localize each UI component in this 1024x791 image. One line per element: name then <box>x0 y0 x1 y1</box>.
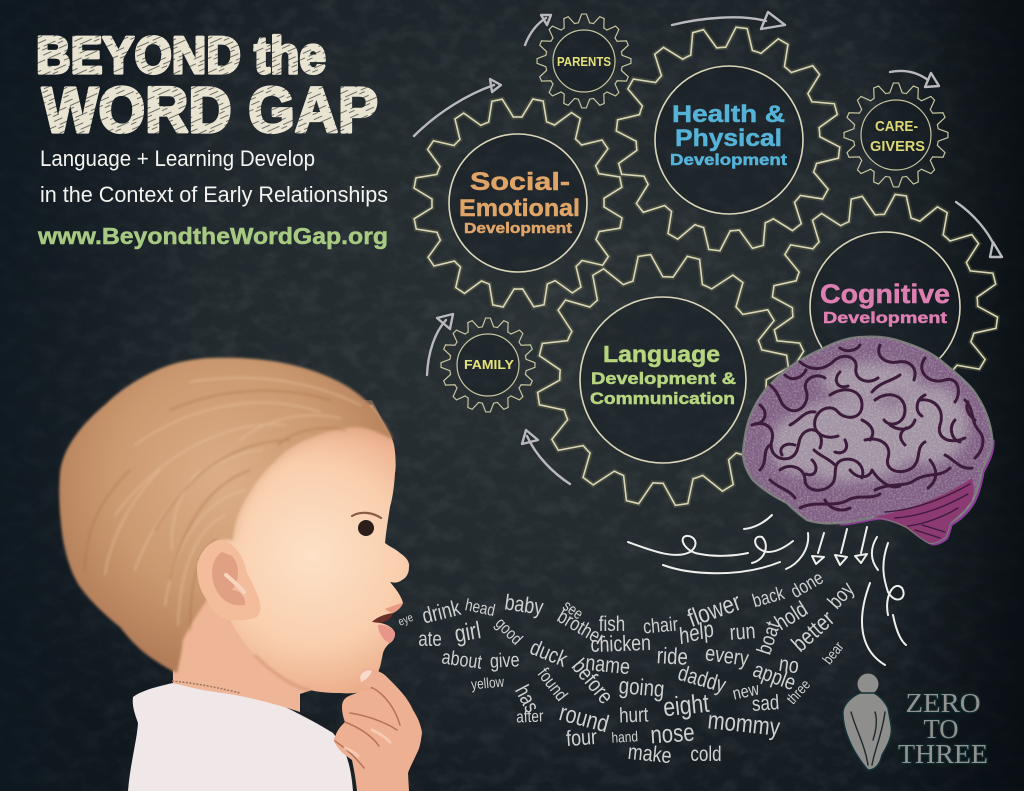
arrow: toward health <box>672 12 785 29</box>
shirt <box>128 683 353 791</box>
word cloud: fish <box>599 613 625 636</box>
word cloud: new <box>731 679 761 704</box>
word cloud: eye <box>396 611 415 629</box>
hand <box>334 668 422 791</box>
label: Language <box>603 341 720 367</box>
gear: health and physical development <box>603 14 853 264</box>
hair <box>59 358 393 673</box>
word cloud: ate <box>418 628 442 651</box>
word cloud: eight <box>662 689 711 723</box>
word cloud: drink <box>420 596 464 629</box>
arrow: social to parents <box>414 79 501 136</box>
word cloud: girl <box>452 616 483 648</box>
gear: language development and communication <box>510 227 816 533</box>
jaw shadow <box>255 655 310 690</box>
label: GIVERS <box>870 138 925 155</box>
illustration: brain <box>740 330 1000 550</box>
arrow: toward caregivers <box>890 71 939 87</box>
neck <box>172 560 312 712</box>
word cloud: better <box>787 606 839 657</box>
word cloud: boy <box>824 578 860 614</box>
word cloud: mommy <box>706 705 782 741</box>
arrow 3 <box>855 527 867 563</box>
label: Development & <box>591 369 736 388</box>
arrow 2 <box>835 529 847 565</box>
word cloud: boat <box>753 618 786 657</box>
label: Development <box>670 152 788 169</box>
word cloud: hold <box>771 597 812 636</box>
heading: Beyond the Word Gap <box>36 27 378 146</box>
word cloud: four <box>565 725 598 752</box>
arrow 1 <box>812 533 824 564</box>
word cloud: has <box>510 682 543 717</box>
label <box>870 118 925 155</box>
word cloud: head <box>463 596 497 620</box>
word cloud: ride <box>656 643 689 670</box>
website link: www.BeyondtheWordGap.org <box>37 223 388 249</box>
chalk squiggle lines below brain <box>628 515 906 665</box>
word cloud: see <box>559 597 586 624</box>
label: PARENTS <box>557 54 611 69</box>
word cloud: help <box>676 617 716 650</box>
word cloud: name <box>584 651 631 680</box>
photo: baby looking at the board <box>59 358 422 791</box>
arrow: toward family <box>427 314 453 375</box>
word cloud: apple <box>750 658 799 696</box>
word cloud: flower <box>684 587 745 632</box>
arrows around gears <box>414 12 1002 484</box>
word cloud: nose <box>649 717 695 749</box>
word cloud: no <box>777 652 800 679</box>
word cloud: three <box>783 676 814 707</box>
word cloud: round <box>556 698 612 738</box>
arrows from brain to words <box>812 527 867 565</box>
logo wordmark <box>898 688 988 769</box>
brain body <box>743 337 992 543</box>
word cloud: yellow <box>470 673 505 693</box>
label: Health & <box>672 101 785 128</box>
label: Development <box>464 220 572 237</box>
cerebellum <box>873 478 974 543</box>
word cloud: baby <box>503 591 545 620</box>
label: Social- <box>470 168 570 196</box>
heading: Beyond the Word Gap: BEYOND the <box>36 27 326 85</box>
label <box>459 168 580 237</box>
word cloud <box>396 566 860 769</box>
word cloud: every <box>704 641 750 671</box>
label <box>820 279 950 327</box>
word cloud: after <box>516 707 544 727</box>
subtitle: context of early relationships <box>40 146 388 207</box>
brain magenta edge <box>840 440 995 546</box>
word cloud: before <box>567 655 618 709</box>
word cloud: brother <box>554 605 609 650</box>
label: Cognitive <box>820 279 950 309</box>
face <box>210 405 409 693</box>
label: FAMILY <box>464 357 514 372</box>
word cloud: hurt <box>619 704 649 728</box>
gear: parents <box>537 14 631 108</box>
subtitle: context of early relationships: in the Context of Early Relationships <box>40 182 388 207</box>
word cloud: hand <box>611 728 638 746</box>
subtitle: context of early relationships: Language + Learning Develop <box>40 146 315 171</box>
word cloud: found <box>533 664 571 705</box>
ear <box>197 540 261 620</box>
arrow: toward cognitive <box>956 202 1002 257</box>
word cloud: chair <box>642 613 679 638</box>
word cloud: back <box>750 582 787 612</box>
logo wordmark: THREE <box>898 739 988 769</box>
word cloud: going <box>618 673 666 702</box>
word cloud: sad <box>751 692 780 716</box>
logo wordmark: ZERO <box>906 688 980 718</box>
word cloud: good <box>491 614 526 649</box>
word cloud: done <box>786 566 827 602</box>
arrow: toward parents <box>525 15 551 45</box>
word cloud: cold <box>690 743 722 766</box>
word cloud: bear <box>819 638 847 667</box>
word cloud: give <box>489 649 520 672</box>
label <box>670 101 788 169</box>
word cloud: about <box>440 646 483 673</box>
word cloud: run <box>729 619 756 645</box>
heading: Beyond the Word Gap: WORD GAP <box>42 74 378 146</box>
arrow: toward language <box>522 430 570 484</box>
mouth <box>372 603 403 643</box>
logo wordmark: TO <box>924 714 958 744</box>
label: Communication <box>590 389 735 408</box>
gear: social-emotional development <box>395 80 641 326</box>
gear: caregivers <box>844 83 948 187</box>
label <box>590 341 736 408</box>
word cloud: duck <box>526 636 571 672</box>
label: Physical <box>675 125 782 152</box>
label: Development <box>823 310 948 327</box>
eye <box>352 513 381 536</box>
brain folds <box>752 345 983 510</box>
necklace <box>172 681 240 693</box>
logo: Zero to Three <box>843 674 988 770</box>
logo figure <box>843 674 891 770</box>
label: CARE- <box>875 118 918 135</box>
hair strands <box>85 378 360 630</box>
label: Emotional <box>459 195 580 222</box>
word cloud: daddy <box>675 661 729 698</box>
gear: cognitive development <box>758 180 1012 434</box>
gear: family <box>441 318 535 412</box>
word cloud: chicken <box>590 631 651 658</box>
brain highlights <box>743 337 992 524</box>
hair fade over forehead <box>200 400 393 540</box>
word cloud: make <box>627 740 673 769</box>
